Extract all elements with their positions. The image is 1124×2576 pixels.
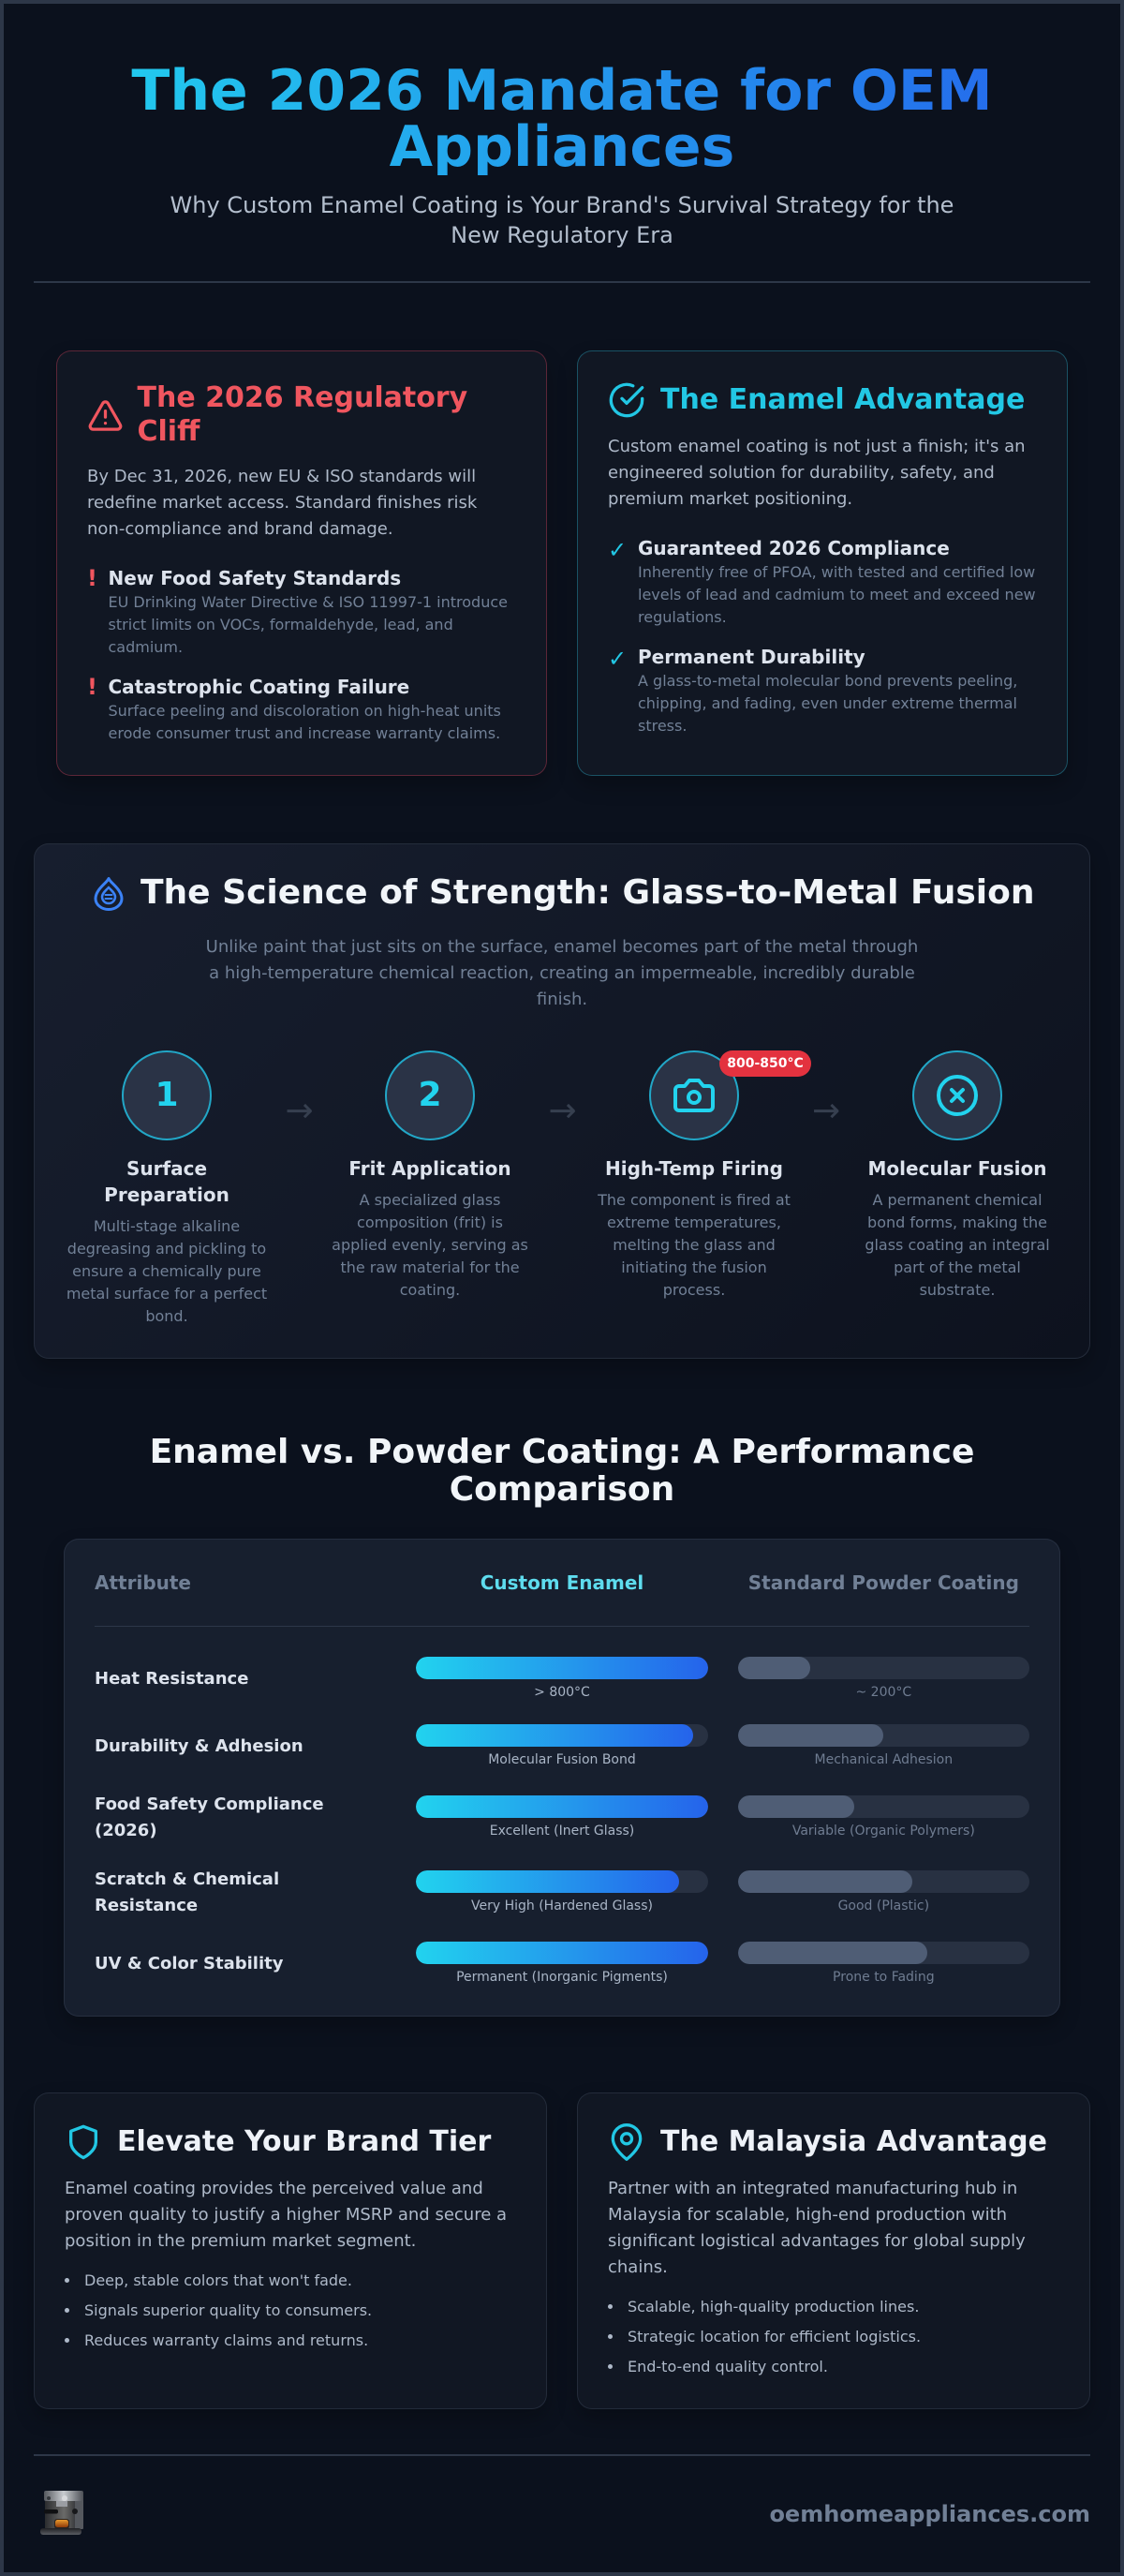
step 2: frit application: Frit Application: [348, 1157, 511, 1180]
paragraph: proven quality to justify a higher MSRP and secure a: [65, 2205, 507, 2225]
step 1: surface preparation: degreasing and pickling to: [67, 1240, 266, 1258]
icon: number 2: 2: [418, 1076, 442, 1114]
step 4: molecular fusion: substrate.: [920, 1281, 995, 1299]
step 1: surface preparation: metal surface for a perfect: [67, 1285, 267, 1303]
row label: scratch: Scratch & Chemical: [95, 1869, 279, 1889]
icon: droplet: [94, 877, 124, 911]
paragraph: Enamel coating provides the perceived value and: [65, 2179, 483, 2198]
intro paragraph: premium market positioning.: [608, 489, 852, 509]
icon: check mark: ✓: [608, 646, 627, 672]
icon: coffee machine logo: [39, 2490, 85, 2537]
step 4: molecular fusion: part of the metal: [894, 1258, 1021, 1276]
bar: enamel food safety: [416, 1795, 708, 1839]
item: permanent durability: chipping, and fading, even under extreme thermal: [638, 694, 1017, 712]
bullet list: Signals superior quality to consumers.: [84, 2301, 372, 2319]
heading text: [137, 381, 467, 448]
panel: elevate your brand tier: [34, 2092, 547, 2409]
step 4: molecular fusion: [865, 1050, 1050, 1299]
row label: food safety: Food Safety Compliance: [95, 1794, 324, 1814]
title: The 2026 Mandate for OEM: [131, 58, 993, 124]
bullet list: Reduces warranty claims and returns.: [84, 2331, 368, 2349]
bullet list: [608, 2298, 921, 2375]
heading text: The 2026 Regulatory: [137, 381, 467, 414]
paragraph: [65, 2179, 507, 2251]
paragraph: position in the premium market segment.: [65, 2231, 416, 2251]
heading text: The Enamel Advantage: [660, 383, 1025, 416]
step 3: high-temp firing: High-Temp Firing: [605, 1157, 783, 1180]
bullet list: End-to-end quality control.: [628, 2358, 828, 2375]
panel: science of strength: [34, 843, 1090, 1359]
step 2: frit application: coating.: [400, 1281, 460, 1299]
paragraph: Partner with an integrated manufacturing hub in: [608, 2179, 1017, 2198]
footer url: oemhomeappliances.com: [769, 2501, 1090, 2527]
item: new food safety standards: cadmium.: [109, 638, 183, 656]
bar: powder scratch: Good (Plastic): [838, 1898, 929, 1913]
intro paragraph: a high-temperature chemical reaction, creating an impermeable, incredibly durable: [209, 963, 915, 983]
step 1: surface preparation: Multi-stage alkaline: [94, 1217, 240, 1235]
icon: map pin: [611, 2123, 643, 2161]
title: [34, 63, 1090, 175]
step 4: molecular fusion: glass coating an integral: [865, 1236, 1050, 1254]
step 2: frit application: applied evenly, serving as: [332, 1236, 528, 1254]
badge: 800-850 C: [719, 1050, 811, 1077]
row label: heat resistance: Heat Resistance: [95, 1669, 248, 1689]
icon: warning triangle: [88, 400, 122, 431]
step 4: molecular fusion: bond forms, making the: [867, 1214, 1047, 1231]
icon: number 1: 1: [155, 1076, 179, 1114]
panel: the malaysia advantage: [577, 2092, 1090, 2409]
intro paragraph: [87, 467, 478, 539]
step 2: frit application: A specialized glass: [360, 1191, 500, 1209]
item: catastrophic coating failure: Surface peeling and discoloration on high-heat units: [109, 702, 501, 720]
item: new food safety standards: [87, 565, 508, 656]
step 3: high-temp firing: extreme temperatures,: [607, 1214, 781, 1231]
icon: exclamation: !: [87, 674, 97, 700]
heading: comparison: Enamel vs. Powder Coating: A Performance: [150, 1433, 974, 1471]
step 1: surface preparation: [67, 1050, 267, 1325]
table header: Standard Powder Coating: [748, 1571, 1019, 1594]
panel: comparison table: [64, 1539, 1060, 2017]
subtitle: New Regulatory Era: [451, 222, 673, 248]
item: guaranteed 2026 compliance: Inherently free of PFOA, with tested and certified low: [638, 563, 1035, 581]
icon: check mark: ✓: [608, 537, 627, 563]
intro paragraph: Unlike paint that just sits on the surface, enamel becomes part of the metal through: [206, 937, 918, 957]
step 3: high-temp firing: melting the glass and: [613, 1236, 776, 1254]
bar: powder durability: [738, 1724, 1029, 1767]
icon: x circle: [912, 1050, 1002, 1140]
row label: durability: Durability & Adhesion: [95, 1736, 303, 1756]
item: catastrophic coating failure: [87, 674, 501, 742]
row label: scratch: Resistance: [95, 1896, 198, 1915]
step 1: surface preparation: bond.: [145, 1307, 188, 1325]
row label: uv: UV & Color Stability: [95, 1954, 283, 1973]
heading: brand tier: [69, 2125, 491, 2159]
intro paragraph: engineered solution for durability, safety, and: [608, 463, 995, 483]
step 4: molecular fusion: Molecular Fusion: [867, 1157, 1046, 1180]
arrow: →: [549, 1092, 577, 1130]
icon: exclamation: !: [87, 565, 97, 591]
intro paragraph: [608, 437, 1026, 509]
table header: Attribute: [95, 1571, 191, 1594]
item: catastrophic coating failure: erode consumer trust and increase warranty claims.: [109, 724, 500, 742]
badge: 800-850 C: 800-850°C: [727, 1056, 804, 1071]
item: guaranteed 2026 compliance: levels of lead and cadmium to meet and exceed new: [638, 586, 1036, 603]
bar: powder scratch: [738, 1870, 1029, 1913]
step 2: frit application: the raw material for the: [340, 1258, 520, 1276]
bar: enamel durability: Molecular Fusion Bond: [488, 1752, 636, 1767]
heading text: Cliff: [137, 415, 200, 448]
bullet list: Strategic location for efficient logistics.: [628, 2328, 921, 2345]
step 2: frit application: [332, 1050, 528, 1299]
bar: powder food safety: Variable (Organic Polymers): [792, 1824, 975, 1839]
item: guaranteed 2026 compliance: regulations.: [638, 608, 727, 626]
item: permanent durability: Permanent Durability: [638, 646, 865, 668]
paragraph: chains.: [608, 2257, 668, 2277]
intro paragraph: redefine market access. Standard finishes risk: [87, 493, 477, 513]
paragraph: [608, 2179, 1026, 2277]
subtitle: [170, 192, 954, 248]
step 3: high-temp firing: process.: [663, 1281, 725, 1299]
arrow: →: [285, 1092, 314, 1130]
paragraph: significant logistical advantages for global supply: [608, 2231, 1026, 2251]
icon: camera: [649, 1050, 739, 1140]
table header: Custom Enamel: [481, 1571, 643, 1594]
bullet list: Deep, stable colors that won't fade.: [84, 2271, 352, 2289]
item: permanent durability: A glass-to-metal molecular bond prevents peeling,: [638, 672, 1017, 690]
intro paragraph: finish.: [537, 990, 587, 1009]
bar: enamel durability: [416, 1724, 708, 1767]
item: guaranteed 2026 compliance: Guaranteed 2026 Compliance: [638, 537, 950, 559]
bullet list: [65, 2271, 372, 2349]
item: new food safety standards: EU Drinking Water Directive & ISO 11997-1 introduce: [109, 593, 508, 611]
icon: number 2: [385, 1050, 475, 1140]
step 2: frit application: composition (frit) is: [357, 1214, 503, 1231]
row label: food safety: [95, 1794, 324, 1840]
item: permanent durability: [608, 646, 1017, 735]
step 1: surface preparation: Preparation: [104, 1184, 229, 1206]
heading text: Elevate Your Brand Tier: [117, 2125, 491, 2158]
bar: enamel uv: Permanent (Inorganic Pigments): [456, 1970, 668, 1985]
item: new food safety standards: New Food Safety Standards: [109, 567, 401, 589]
heading: regulatory cliff: [88, 381, 467, 448]
step 3: high-temp firing: The component is fired at: [598, 1191, 791, 1209]
heading: science of strength: The Science of Strength: Glass-to-Metal Fusion: [140, 873, 1035, 912]
bar: powder uv: Prone to Fading: [833, 1970, 935, 1985]
step 4: molecular fusion: A permanent chemical: [872, 1191, 1043, 1209]
row label: scratch: [95, 1869, 279, 1915]
step 1: surface preparation: Surface: [126, 1157, 207, 1180]
icon: shield: [69, 2125, 97, 2159]
panel: the 2026 regulatory cliff: [56, 350, 547, 776]
arrow: →: [812, 1092, 840, 1130]
row label: food safety: (2026): [95, 1821, 157, 1840]
bar: enamel food safety: Excellent (Inert Glass): [490, 1824, 634, 1839]
intro paragraph: Custom enamel coating is not just a finish; it's an: [608, 437, 1026, 456]
intro paragraph: non-compliance and brand damage.: [87, 519, 393, 539]
bullet list: Scalable, high-quality production lines.: [628, 2298, 919, 2315]
step 1: surface preparation: ensure a chemically pure: [72, 1262, 261, 1280]
bar: powder heat: [738, 1657, 1029, 1700]
icon: number 1: [122, 1050, 212, 1140]
comparison rows: [95, 1657, 1029, 1985]
step 3: high-temp firing: [598, 1050, 791, 1299]
intro paragraph: [206, 937, 918, 1009]
paragraph: Malaysia for scalable, high-end production with: [608, 2205, 1007, 2225]
step 3: high-temp firing: initiating the fusion: [621, 1258, 767, 1276]
bar: enamel heat: > 800°C: [534, 1685, 590, 1700]
heading: malaysia advantage: [611, 2123, 1047, 2161]
subtitle: Why Custom Enamel Coating is Your Brand's Survival Strategy for the: [170, 192, 954, 218]
bar: enamel heat: [416, 1657, 708, 1700]
heading: comparison: [150, 1433, 974, 1509]
heading text: The Malaysia Advantage: [660, 2125, 1047, 2158]
heading: comparison: Comparison: [450, 1470, 674, 1509]
item: new food safety standards: strict limits on VOCs, formaldehyde, lead, and: [109, 616, 453, 633]
bar: powder food safety: [738, 1795, 1029, 1839]
bar: powder uv: [738, 1942, 1029, 1985]
item: permanent durability: stress.: [638, 717, 687, 735]
bar: enamel uv: [416, 1942, 708, 1985]
title: Appliances: [390, 114, 734, 180]
panel: the enamel advantage: [577, 350, 1068, 776]
bar: enamel scratch: [416, 1870, 708, 1913]
item: catastrophic coating failure: Catastrophic Coating Failure: [109, 676, 409, 698]
bar: powder heat: ~ 200°C: [855, 1685, 911, 1700]
bar: enamel scratch: Very High (Hardened Glass): [471, 1898, 653, 1913]
table header: [95, 1570, 1029, 1627]
bar: powder durability: Mechanical Adhesion: [815, 1752, 953, 1767]
item: guaranteed 2026 compliance: [608, 537, 1036, 626]
intro paragraph: By Dec 31, 2026, new EU & ISO standards will: [87, 467, 476, 486]
icon: check circle: [609, 382, 644, 418]
heading: enamel advantage: [609, 382, 1025, 418]
